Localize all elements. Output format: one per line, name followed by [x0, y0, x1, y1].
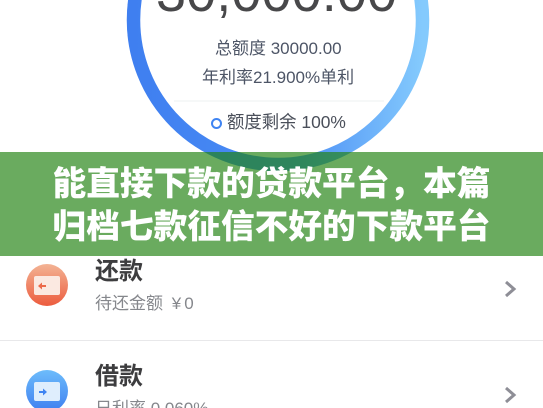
total credit text: 总额度 30000.00 [215, 39, 342, 58]
icon: borrow card [26, 370, 68, 408]
icon: repay card [26, 264, 68, 306]
repay heading: 还款 [95, 258, 143, 285]
title [53, 165, 490, 246]
title: 归档七款征信不好的下款平台 [53, 208, 490, 246]
panel: repay row [0, 256, 543, 341]
icon: blue ring dot [211, 118, 222, 129]
remaining credit text: 额度剩余 100% [227, 112, 346, 132]
remaining credit indicator [211, 112, 346, 132]
icon: chevron [505, 281, 516, 297]
icon: chevron [505, 387, 516, 403]
title banner [0, 152, 543, 256]
panel: borrow row [0, 341, 543, 408]
borrow heading: 借款 [95, 363, 143, 390]
title: 能直接下款的贷款平台，本篇 [53, 165, 490, 203]
annual rate text: 年利率21.900%单利 [202, 68, 354, 87]
repay amount text: 待还金额 ¥0 [95, 294, 197, 313]
